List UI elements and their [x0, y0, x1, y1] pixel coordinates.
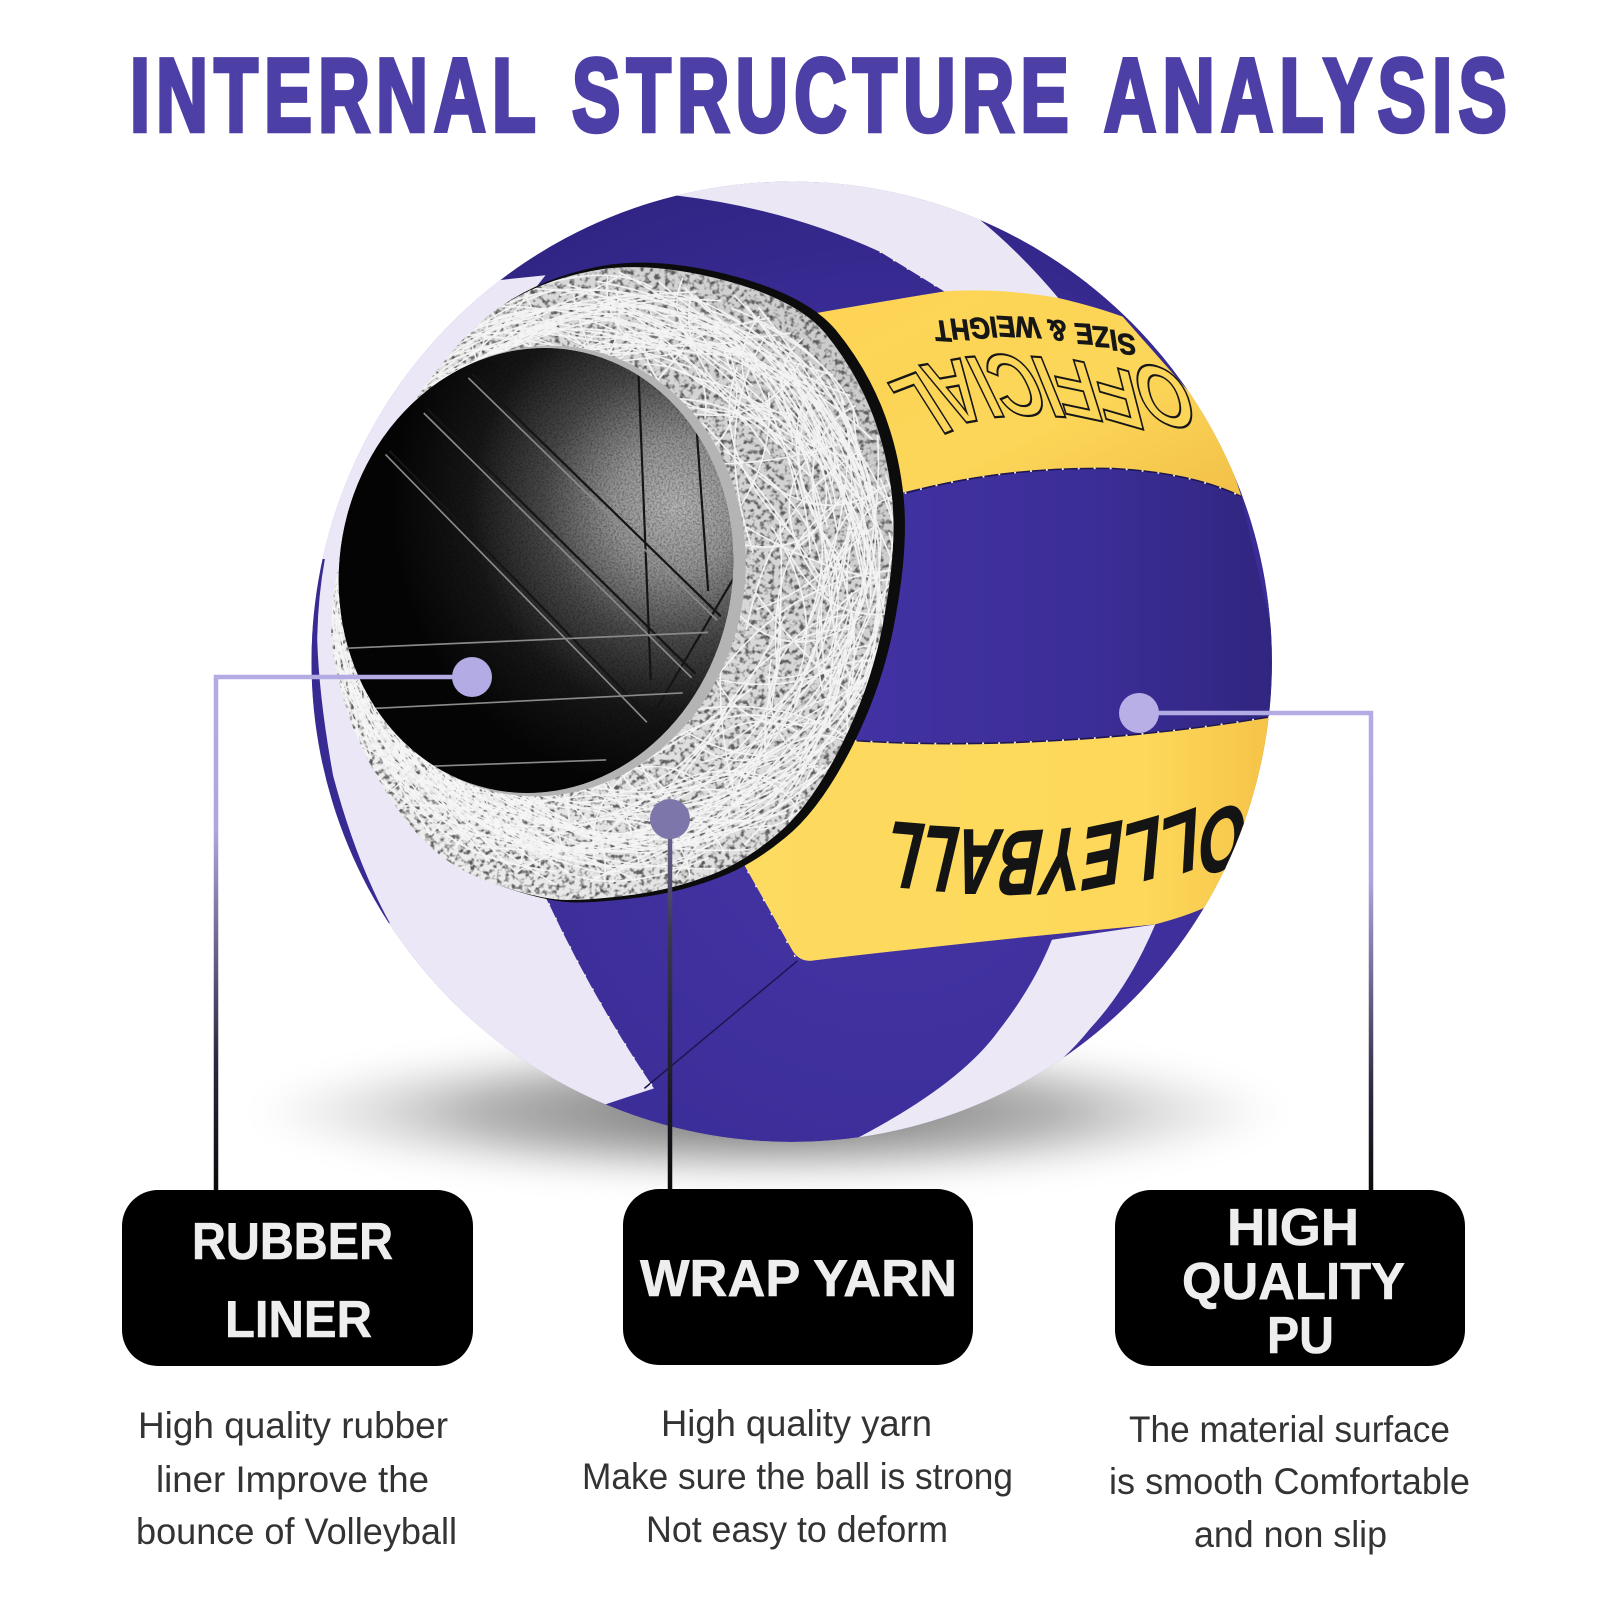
- rubber rim: [305, 313, 781, 829]
- middle purple panel: [1092, 474, 1272, 737]
- volleyball: [311, 182, 1272, 1142]
- label box: rubber liner: [122, 1190, 473, 1366]
- description: high quality PU: The material surface: [1129, 1409, 1450, 1450]
- description: wrap yarn: Make sure the ball is strong: [582, 1456, 1013, 1497]
- yarn speckle: [331, 267, 893, 900]
- ball base: [311, 181, 1272, 1142]
- description: wrap yarn: [582, 1403, 1013, 1550]
- callout line: rubber liner: [216, 677, 472, 1190]
- description: rubber liner: High quality rubber: [138, 1405, 448, 1446]
- upper yellow band: [817, 290, 1241, 497]
- callout line: wrap yarn: [668, 819, 672, 1190]
- rubber liner interior: [304, 317, 768, 824]
- top white panel: [676, 179, 1060, 299]
- label box: wrap yarn: WRAP YARN: [640, 1250, 957, 1308]
- rubber grain: [304, 317, 768, 824]
- description: high quality PU: is smooth Comfortable: [1109, 1461, 1470, 1502]
- yarn base: [331, 267, 893, 900]
- left white panel: [300, 275, 654, 1127]
- lower yellow band: [740, 715, 1279, 961]
- ground shadow: [250, 1036, 1330, 1188]
- description: wrap yarn: Not easy to deform: [646, 1509, 948, 1550]
- label box: high quality PU: HIGH: [1227, 1199, 1359, 1257]
- callout line: high quality PU: [1139, 713, 1371, 1190]
- label box: high quality PU: PU: [1267, 1307, 1334, 1365]
- title: [130, 38, 1513, 154]
- ball cover: [300, 179, 1279, 1146]
- volleyball text: OLLEYBALL: [870, 779, 1276, 915]
- cutout shadow: [339, 266, 901, 899]
- marker dot: rubber liner: [452, 657, 492, 697]
- description: rubber liner: [136, 1405, 457, 1552]
- description: rubber liner: liner Improve the: [156, 1459, 429, 1500]
- title: INTERNAL: [130, 38, 542, 154]
- label box: rubber liner: RUBBER: [192, 1213, 393, 1271]
- description: wrap yarn: High quality yarn: [661, 1403, 932, 1444]
- label box: high quality PU: QUALITY: [1182, 1253, 1405, 1311]
- lower right white panel: [842, 924, 1155, 1146]
- label box: high quality PU: [1115, 1190, 1465, 1366]
- rubber shading: [304, 317, 768, 824]
- description: high quality PU: [1109, 1409, 1470, 1555]
- panel seams: [644, 468, 1276, 1088]
- title: STRUCTURE: [572, 38, 1075, 154]
- size and weight text: SIZE & WEIGHT: [930, 304, 1138, 361]
- yarn fibres: [332, 271, 894, 886]
- seam stitches: [549, 252, 1276, 1088]
- description: high quality PU: and non slip: [1194, 1514, 1387, 1555]
- rubber seams: [345, 361, 734, 766]
- marker dot: high quality PU: [1119, 693, 1159, 733]
- left purple sliver: [311, 559, 390, 924]
- label box: rubber liner: LINER: [225, 1291, 372, 1349]
- marker dot: wrap yarn: [650, 799, 690, 839]
- official text: OFFICIAL: [860, 336, 1227, 457]
- description: rubber liner: bounce of Volleyball: [136, 1511, 457, 1552]
- label box: wrap yarn: [623, 1189, 973, 1365]
- wrap yarn layer: [331, 267, 894, 900]
